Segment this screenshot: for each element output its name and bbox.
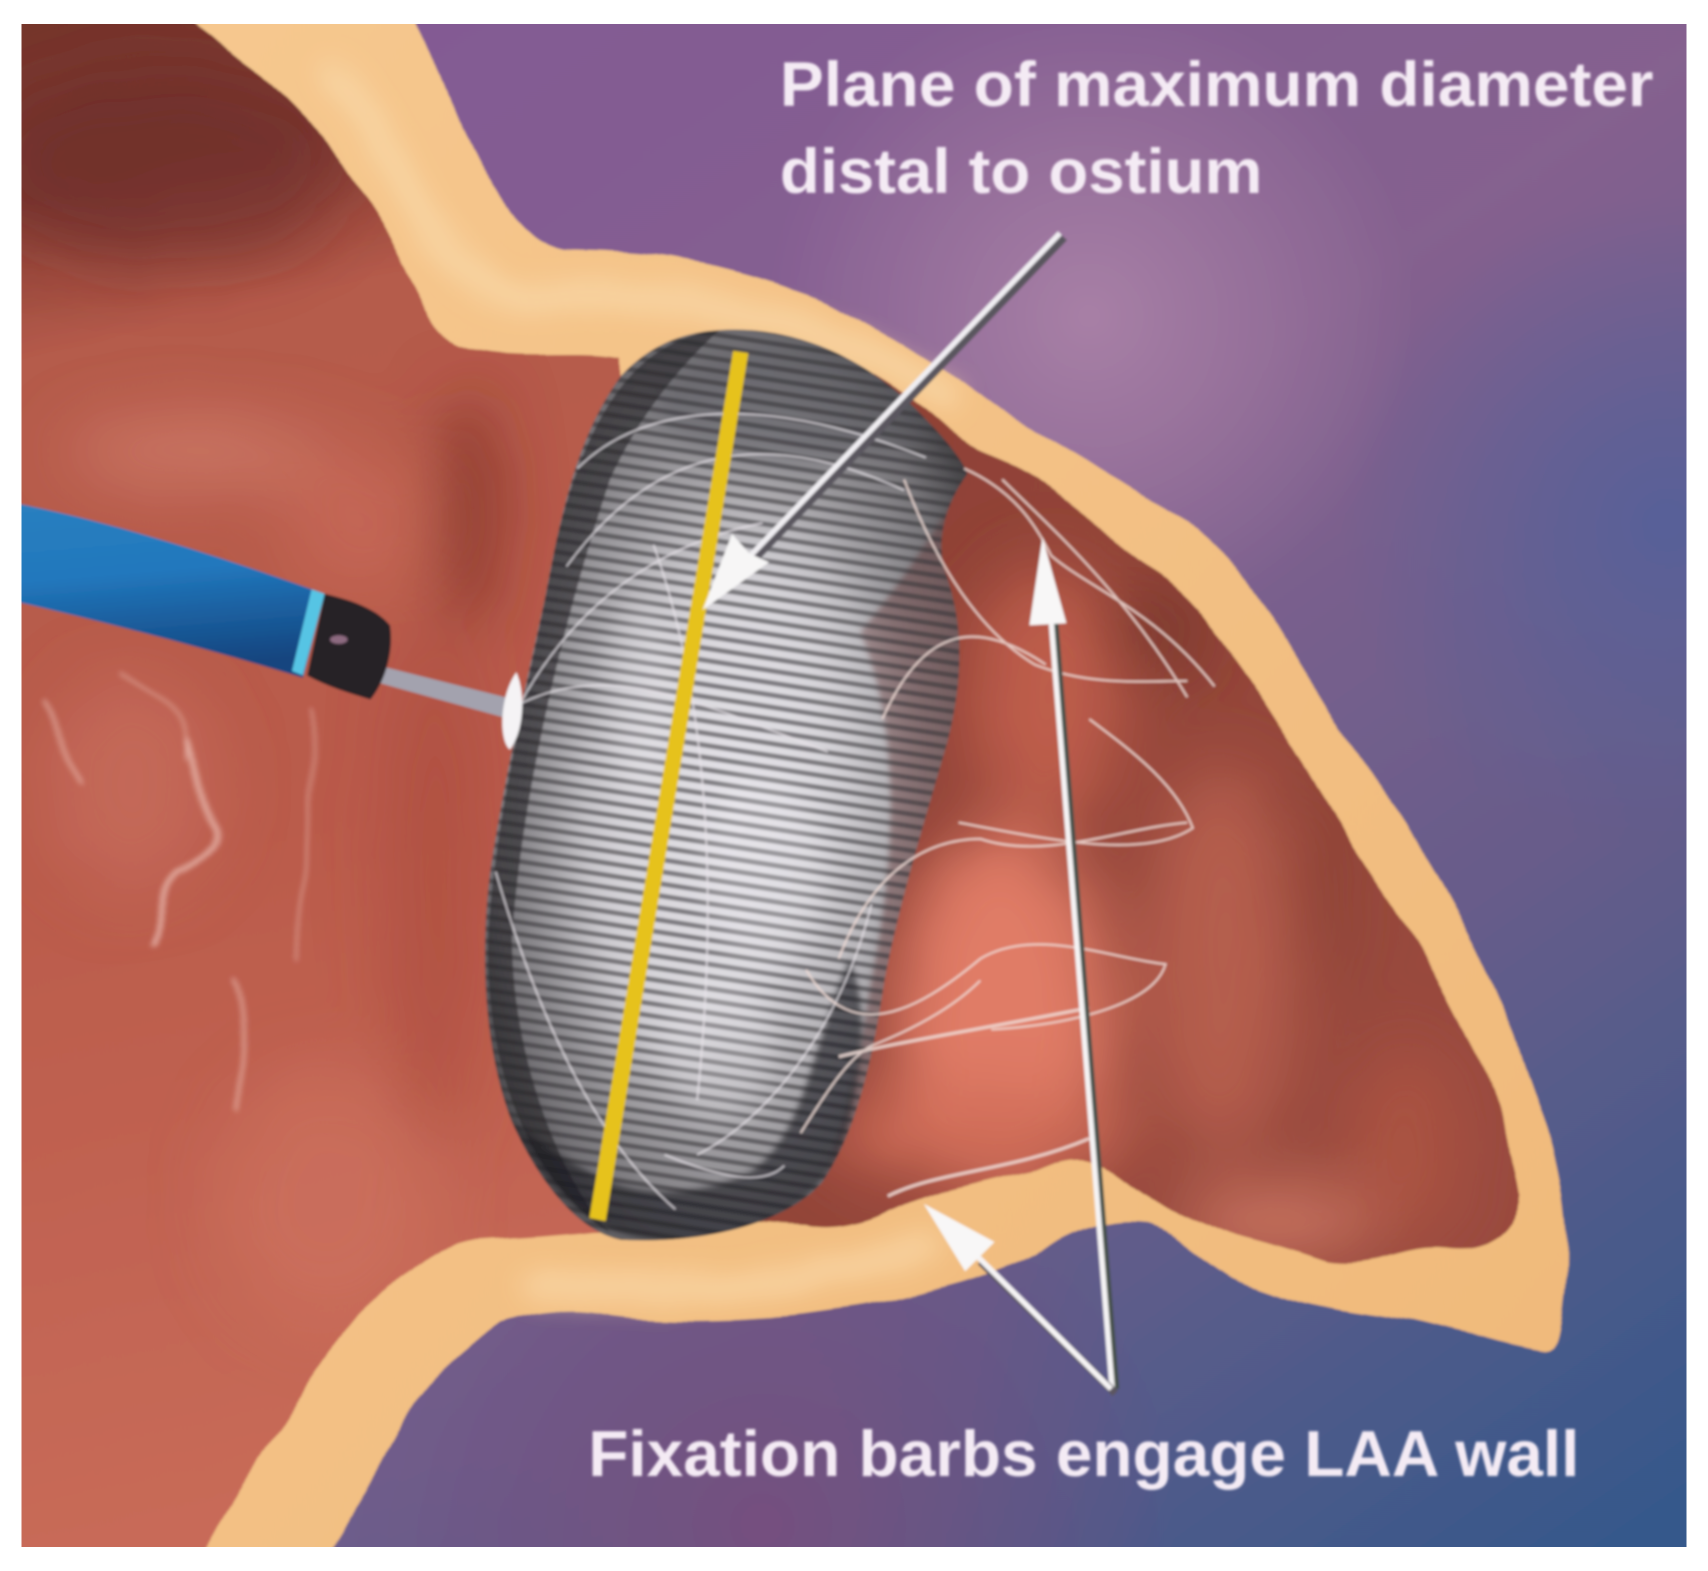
upper grey shadow [654, 343, 937, 463]
wall highlight [327, 65, 959, 1289]
occluder device [468, 316, 980, 1253]
catheter blue sheath [11, 502, 325, 678]
catheter black tip [307, 594, 391, 699]
fixation barb wires [801, 469, 1215, 1196]
background panel [332, 24, 1686, 1547]
bright central mesh [543, 515, 895, 1097]
arrow: plane of maximum diameter [703, 233, 1064, 610]
mesh stripes [468, 316, 980, 1253]
catheter [11, 502, 514, 719]
arrow: barb lower [924, 1204, 1115, 1393]
catheter cyan band [292, 589, 325, 675]
white hub clip [502, 672, 522, 750]
label: plane of maximum diameter: distal to ostium [780, 137, 1262, 207]
label: plane of maximum diameter: Plane of maximum diameter [780, 50, 1654, 120]
white tissue streaks [44, 675, 312, 1111]
yellow plane line [589, 351, 748, 1221]
label: fixation barbs: Fixation barbs engage LAA wall [588, 1417, 1579, 1490]
translucent far side of device [806, 479, 980, 1220]
arrow: barb upper [1029, 537, 1115, 1389]
wire strands [496, 414, 926, 1209]
cavity shading [828, 567, 1460, 1251]
dark lower shadow [512, 959, 862, 1242]
left atrium interior [22, 24, 622, 1547]
shading: upper tissue folds [0, 65, 497, 1329]
catheter shaft wire [376, 667, 514, 719]
dark rim shadow [488, 330, 719, 1233]
bright mottled patches [610, 599, 822, 1122]
label: plane of maximum diameter [780, 50, 1654, 207]
right cavity interior [758, 373, 1521, 1266]
